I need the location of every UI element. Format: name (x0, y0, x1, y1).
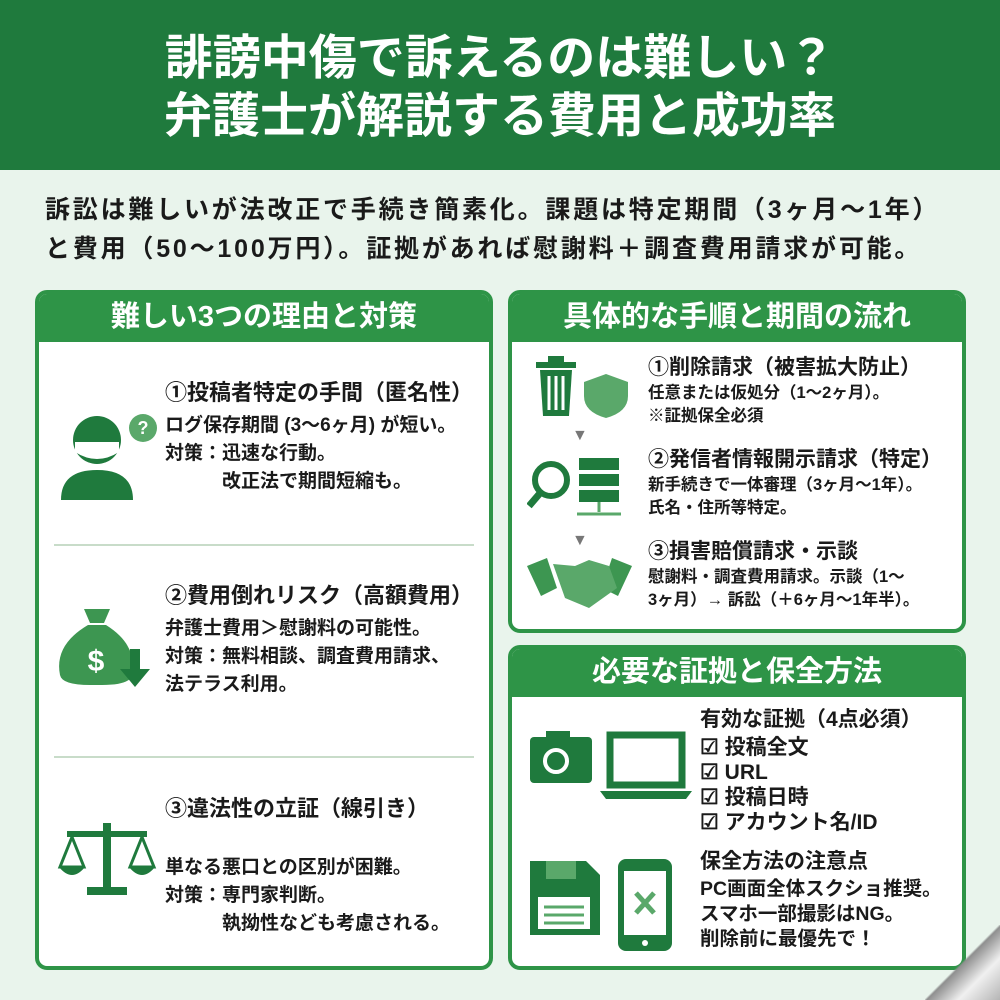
text: steps: 慰謝料・調査費用請求。示談（1〜 (648, 568, 905, 586)
text: preservation: 削除前に最優先で！ (700, 928, 876, 950)
panel: procedure: 具体的な手順と期間の流れ (563, 301, 911, 333)
text: reason 3: 執拗性なども考慮される。 (222, 913, 450, 934)
panel: procedure (508, 290, 966, 633)
text: reason 3: 対策：専門家判断。 (165, 885, 336, 906)
panel: evidence: 必要な証拠と保全方法 (592, 656, 882, 688)
text: valid evidence: ☑ URL (700, 761, 768, 784)
summary text: 訴訟は難しいが法改正で手続き簡素化。課題は特定期間（3ヶ月〜1年） (45, 196, 940, 224)
text: reason 3: ③違法性の立証（線引き） (165, 796, 429, 821)
text: reason 2: 対策：無料相談、調査費用請求、 (165, 646, 450, 667)
icon: trash and shield (536, 356, 628, 418)
icon: floppy and phone (530, 859, 672, 951)
icon: magnifier and server (527, 458, 621, 516)
summary text (45, 196, 940, 263)
text: valid evidence: 有効な証拠（4点必須） (700, 708, 922, 731)
panel: reasons: 難しい3つの理由と対策 (111, 301, 417, 333)
text: reason 3: 単なる悪口との区別が困難。 (165, 857, 412, 878)
panel: evidence (508, 645, 966, 970)
icon: handshake (527, 558, 632, 608)
text: steps: ②発信者情報開示請求（特定） (648, 448, 942, 471)
text: valid evidence: ☑ 投稿全文 (700, 736, 809, 759)
text: preservation: スマホ一部撮影はNG。 (700, 903, 904, 925)
text: steps: ※証拠保全必須 (648, 407, 764, 425)
title banner (0, 0, 1000, 170)
icon: camera and laptop (530, 731, 692, 799)
title banner: 弁護士が解説する費用と成功率 (164, 90, 836, 143)
arrow: ▼ (572, 427, 588, 444)
text: preservation: PC画面全体スクショ推奨。 (700, 878, 942, 900)
text: reason 1 (165, 380, 473, 492)
text: preservation: 保全方法の注意点 (700, 850, 868, 873)
icon: money bag: $ (88, 645, 105, 678)
text: steps: 3ヶ月）→ 訴訟（＋6ヶ月〜1年半）。 (648, 591, 919, 609)
text: steps: ③損害賠償請求・示談 (648, 540, 858, 563)
text: reason 2 (165, 583, 473, 695)
text: reason 2: 弁護士費用＞慰謝料の可能性。 (165, 618, 431, 639)
text: preservation (700, 850, 942, 950)
text: valid evidence: ☑ アカウント名/ID (700, 811, 878, 834)
icon: scales (58, 823, 156, 895)
summary text: と費用（50〜100万円）。証拠があれば慰謝料＋調査費用請求が可能。 (45, 235, 922, 263)
icon: money bag (59, 609, 150, 687)
arrow: ▼ (572, 532, 588, 549)
text: reason 1: 対策：迅速な行動。 (165, 443, 336, 464)
text: reason 1: ①投稿者特定の手間（匿名性） (165, 380, 473, 405)
title banner: 誹謗中傷で訴えるのは難しい？ (165, 32, 835, 85)
text: valid evidence: ☑ 投稿日時 (700, 786, 809, 809)
page curl (925, 925, 1000, 1000)
icon: masked person: ? (138, 418, 148, 438)
text: steps (648, 356, 942, 609)
text: valid evidence (700, 708, 922, 834)
text: steps: 新手続きで一体審理（3ヶ月〜1年）。 (648, 476, 922, 494)
text: reason 2: ②費用倒れリスク（高額費用） (165, 583, 473, 608)
icon: masked person (61, 414, 157, 500)
text: reason 1: ログ保存期間 (3〜6ヶ月) が短い。 (165, 415, 456, 436)
text: reason 2: 法テラス利用。 (165, 674, 298, 695)
text: reason 3 (165, 796, 450, 934)
text: steps: ①削除請求（被害拡大防止） (648, 356, 921, 379)
panel: reasons (35, 290, 493, 970)
text: steps: 氏名・住所等特定。 (648, 499, 796, 517)
text: steps: 任意または仮処分（1〜2ヶ月）。 (648, 384, 889, 402)
text: reason 1: 改正法で期間短縮も。 (222, 471, 412, 492)
